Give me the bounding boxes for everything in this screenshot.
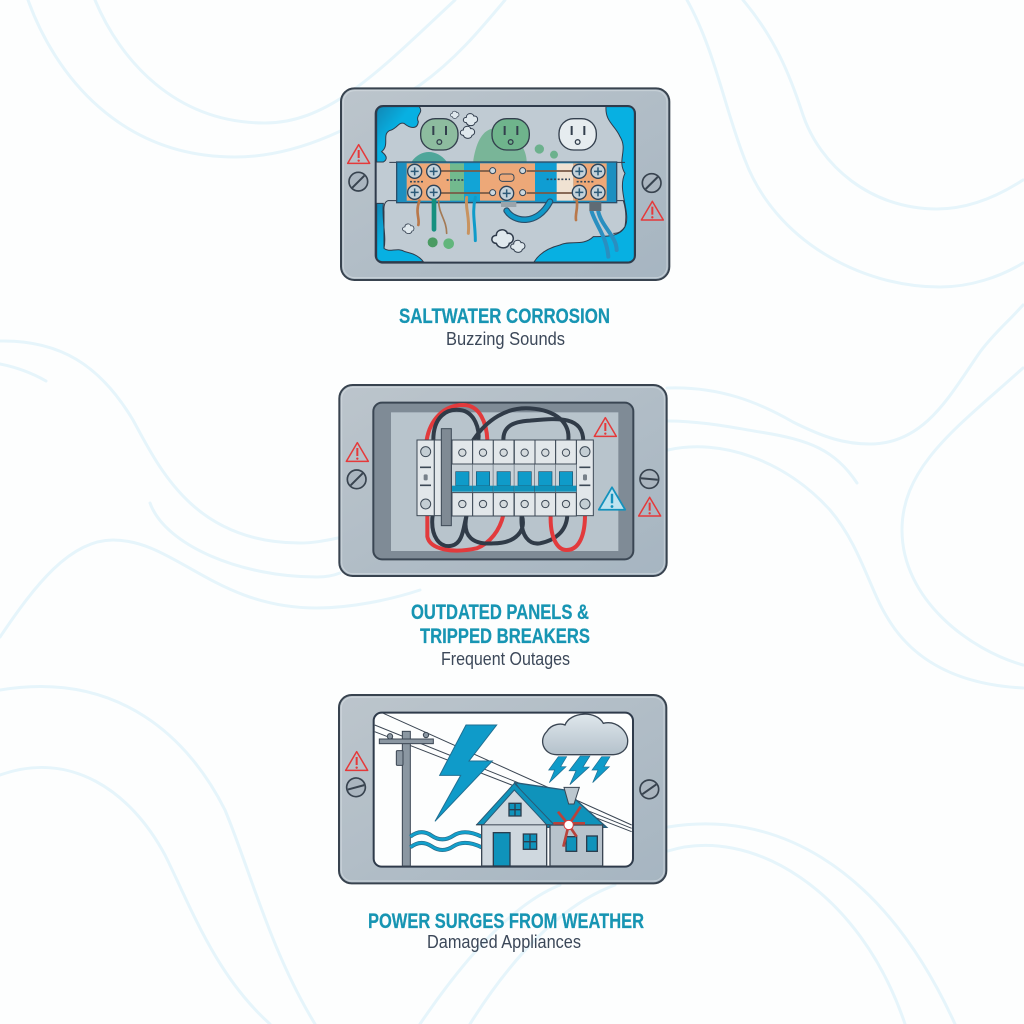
breaker row [417, 440, 593, 516]
screws [349, 172, 661, 192]
faceplate 3 [339, 695, 666, 883]
text: damaged appliances: Damaged Appliances [427, 932, 581, 952]
wires behind breakers [427, 405, 585, 551]
screws [343, 775, 660, 800]
house [476, 783, 607, 866]
vertical bus bar [441, 429, 451, 526]
storm cloud [543, 714, 628, 755]
corroded wires [418, 197, 617, 257]
flood waves [410, 832, 482, 850]
scene window [374, 713, 633, 867]
panel: power surges illustration [339, 695, 666, 883]
heading: saltwater corrosion: SALTWATER CORROSION [399, 305, 610, 328]
screws [347, 466, 662, 492]
heading: power surges: POWER SURGES FROM WEATHER [368, 910, 644, 933]
opening with water damage [376, 106, 635, 263]
utility pole [379, 731, 433, 866]
power lines [375, 713, 632, 832]
small bolts [549, 756, 610, 785]
outlets [421, 119, 596, 150]
lightning bolt [435, 725, 497, 821]
terminal block [397, 162, 617, 203]
text: frequent outages: Frequent Outages [441, 649, 570, 669]
warning icon [346, 752, 368, 770]
warning icons [348, 145, 663, 220]
heading: outdated panels: OUTDATED PANELS & [411, 601, 589, 624]
corrosion blooms [403, 111, 525, 252]
warning icons [346, 418, 661, 516]
faceplate 1 [341, 88, 669, 280]
panel: outdated breaker panel illustration [339, 385, 667, 576]
heading: outdated panels [411, 601, 590, 648]
recessed opening [373, 403, 633, 559]
faceplate 2 [339, 385, 667, 576]
text: buzzing sounds: Buzzing Sounds [446, 329, 565, 349]
heading: outdated panels: TRIPPED BREAKERS [420, 625, 590, 648]
panel: saltwater corrosion illustration [341, 88, 669, 280]
